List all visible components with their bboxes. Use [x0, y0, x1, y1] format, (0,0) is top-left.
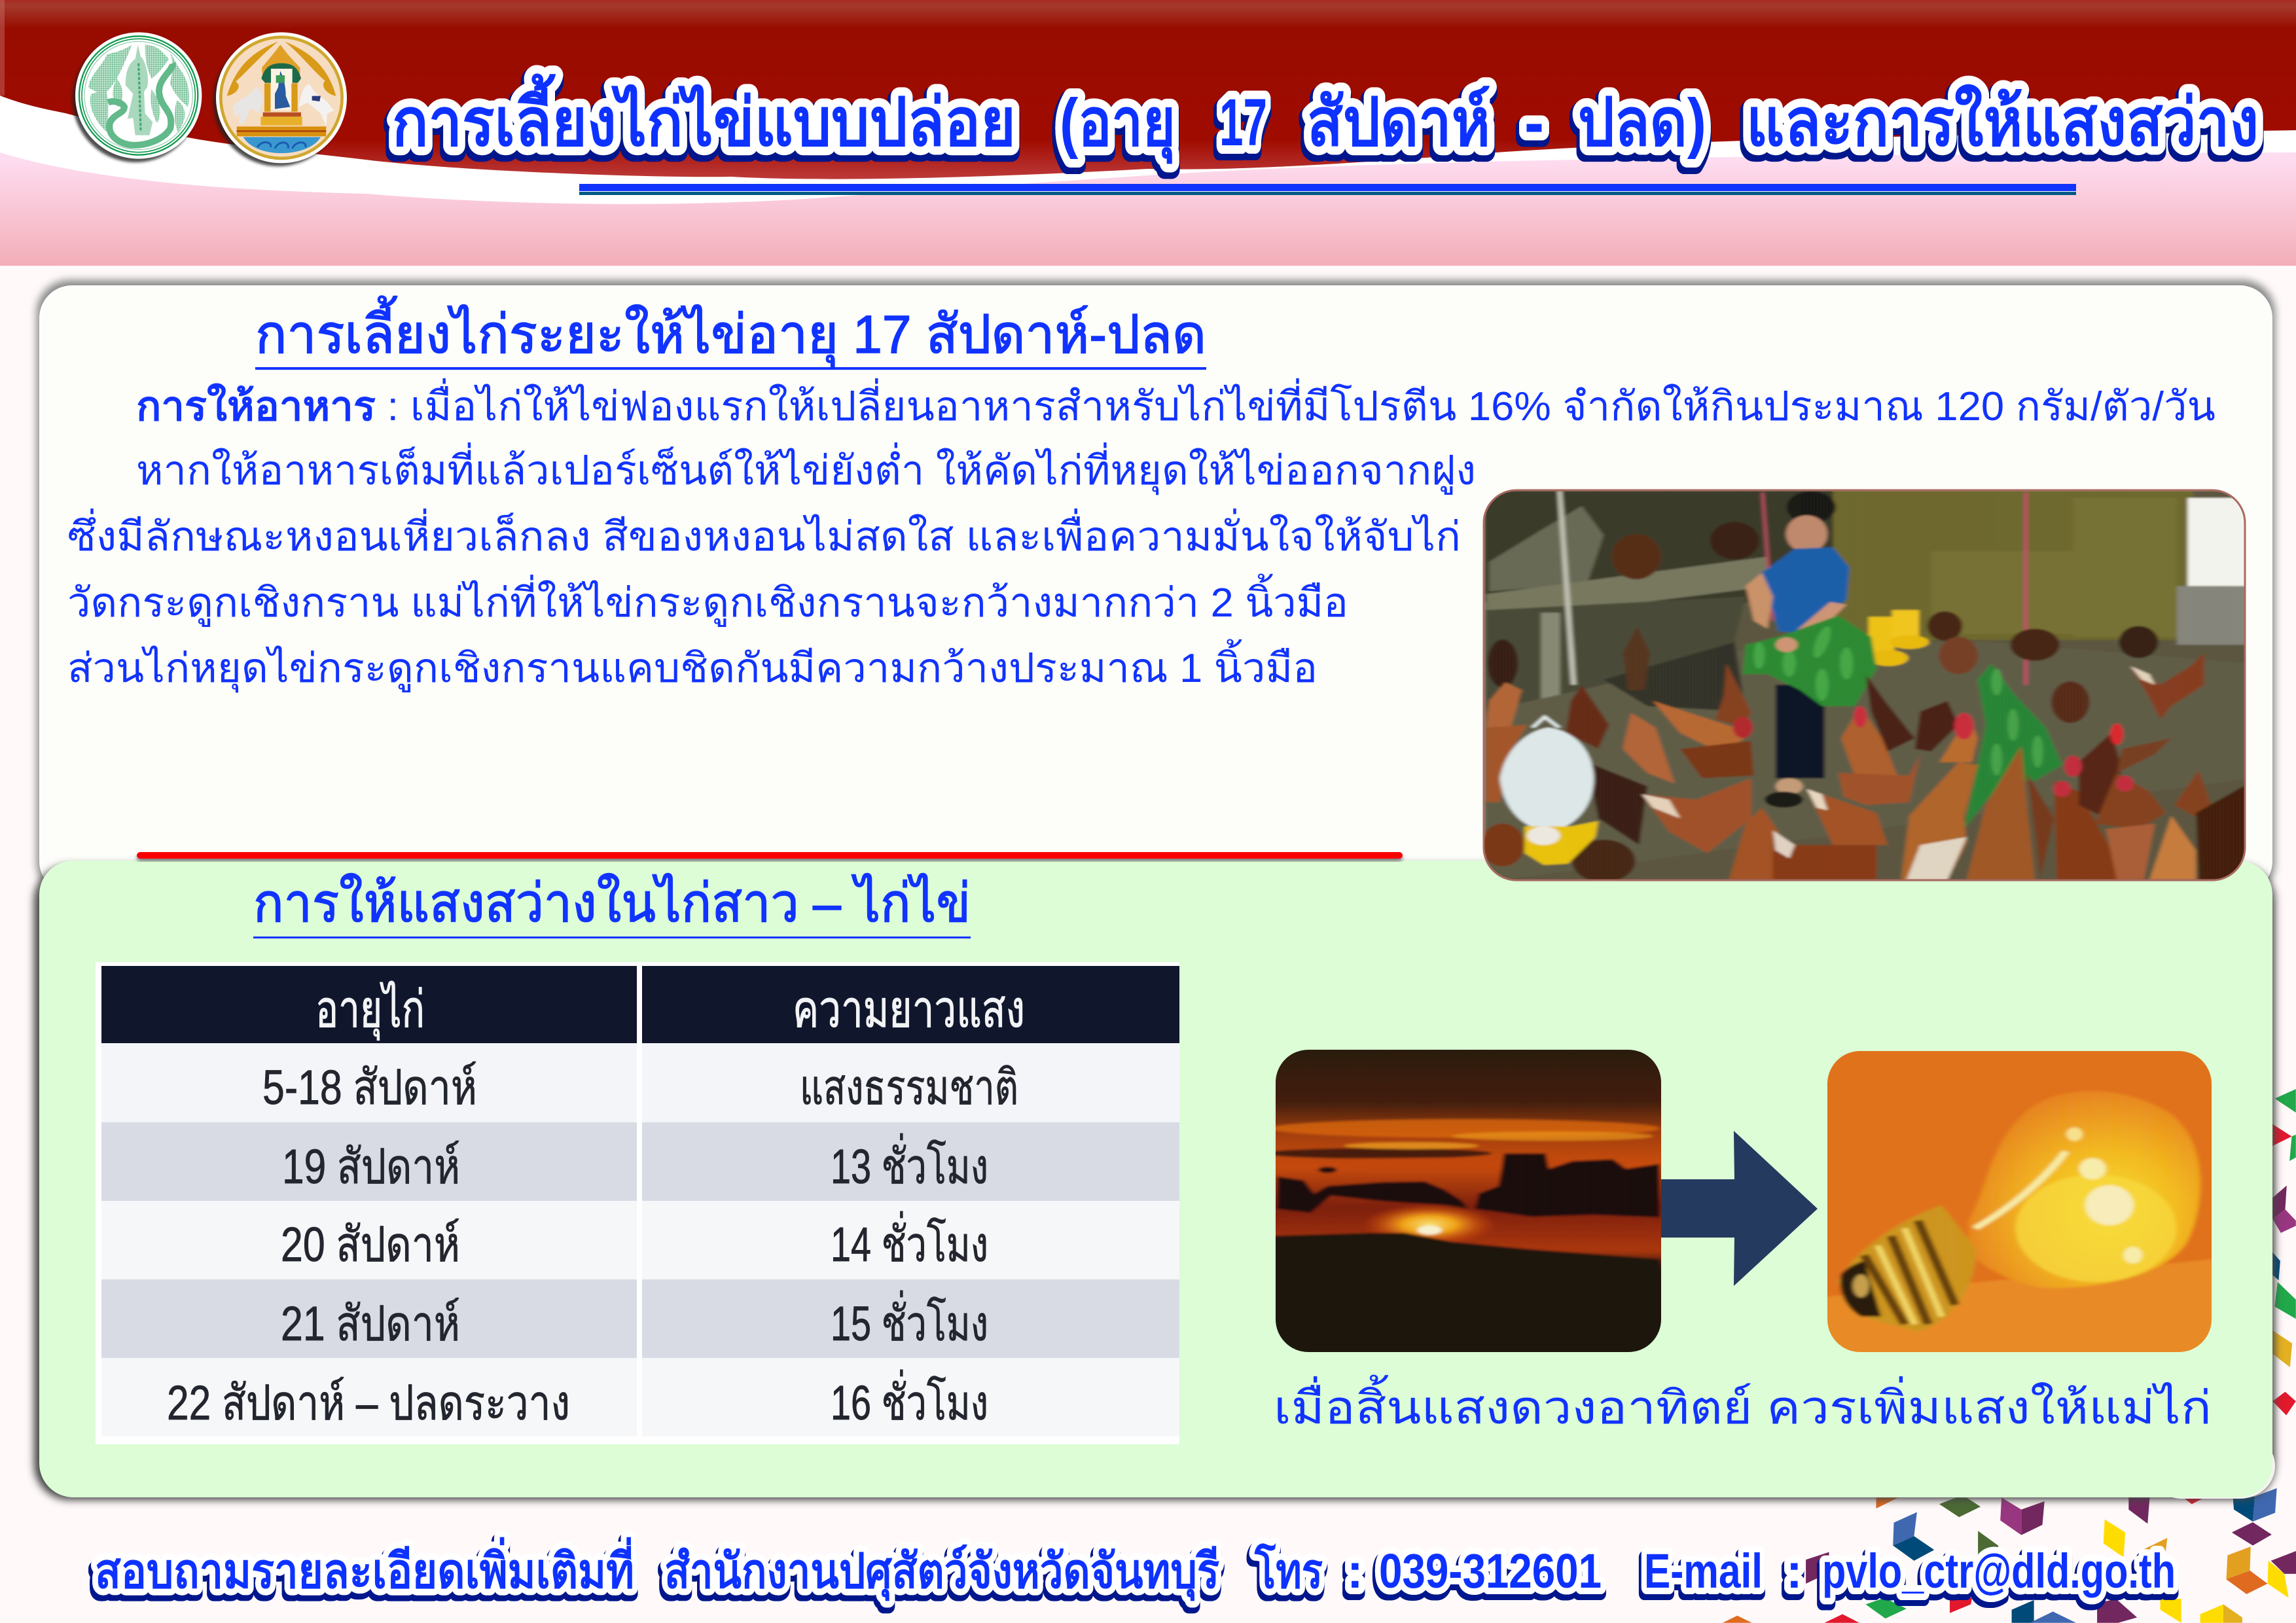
table rows: 13 ชั่วโมง [831, 1133, 988, 1194]
table rows: 19 สัปดาห์ [282, 1139, 460, 1194]
panel: lighting (green) [34, 861, 2275, 1500]
title underline bar [579, 184, 2076, 195]
footer contact line: : [1786, 1544, 1803, 1598]
table header row: อายุไก่ [315, 980, 425, 1041]
white drinker [1500, 728, 1594, 832]
footer contact line [95, 1537, 2176, 1601]
title: - [1524, 85, 1544, 160]
lighting table [96, 962, 1179, 1444]
logo: green seal of Department of Livestock [73, 32, 202, 162]
table rows: 21 สัปดาห์ [281, 1296, 460, 1351]
heading: lighting for pullets and layers: การให้แสงสว่างในไก่สาว – ไก่ไข่ [253, 874, 971, 933]
footer contact line: สำนักงานปศุสัตว์จังหวัดจันทบุรี [664, 1544, 1219, 1601]
footer contact line: : [1347, 1544, 1363, 1598]
footer contact line: pvlo_ctr@dld.go.th [1822, 1544, 2176, 1598]
table rows: 22 สัปดาห์ – ปลดระวาง [167, 1376, 570, 1430]
table rows [101, 1043, 1179, 1436]
hens [1488, 639, 1518, 687]
text block: feeding paragraph [67, 378, 2215, 692]
photo: boy feeding free-range hens [1481, 490, 2248, 883]
logo: gold provincial seal [213, 32, 347, 166]
text block: feeding paragraph: หากให้อาหารเต็มที่แล้วเปอร์เซ็นต์ให้ไข่ยังต่ำ ให้คัดไก่ที่หยุดให้ไข่ออกจากฝูง [136, 442, 1476, 495]
table rows: 16 ชั่วโมง [831, 1369, 988, 1430]
header banner [0, 0, 2296, 266]
text block: feeding paragraph: ส่วนไก่หยุดไข่กระดูกเชิงกรานแคบชิดกันมีความกว้างประมาณ 1 นิ้วมือ [67, 639, 1318, 692]
footer contact line: โทร [1254, 1543, 1323, 1598]
decorative coloured cubes, bottom right [1723, 1488, 2296, 1623]
title [392, 73, 2259, 164]
photo: glowing light bulb [1821, 1048, 2223, 1355]
footer contact line: 039-312601 [1379, 1544, 1602, 1598]
table rows: 5-18 สัปดาห์ [262, 1060, 477, 1115]
footer contact line: สอบถามรายละเอียดเพิ่มเติมที่ [95, 1537, 634, 1598]
background hens [1928, 611, 1962, 641]
text block: feeding paragraph: วัดกระดูกเชิงกราน แม่ไก่ที่ให้ไข่กระดูกเชิงกรานจะกว้างมากกว่า 2 นิ้วมือ [67, 573, 1348, 627]
heading: layer-stage feeding: การเลี้ยงไก่ระยะให้ไข่อายุ 17 สัปดาห์-ปลด [255, 296, 1206, 367]
greens [1743, 615, 1876, 706]
table rows: 20 สัปดาห์ [281, 1217, 460, 1272]
table rows: แสงธรรมชาติ [800, 1060, 1018, 1115]
table rows: 15 ชั่วโมง [831, 1290, 988, 1351]
text block: feeding paragraph: ซึ่งมีลักษณะหงอนเหี่ยวเล็กลง สีของหงอนไม่สดใส และเพื่อความมั่นใจให้จับไก่ [67, 508, 1461, 560]
title: (อายุ [1060, 85, 1175, 164]
text block: feeding paragraph: การให้อาหาร : เมื่อไก่ให้ไข่ฟองแรกให้เปลี่ยนอาหารสำหรับไก่ไข่ที่มีโปรตีน 16% จำกัดให้กินประมาณ 120 กรัม/ตัว/วัน [136, 378, 2215, 429]
caption: add light after sunset: เมื่อสิ้นแสงดวงอาทิตย์ ควรเพิ่มแสงให้แม่ไก่ [1274, 1374, 2212, 1433]
photo: sunset [1257, 1048, 1673, 1355]
boy [1787, 491, 1836, 524]
yellow feeders [1869, 616, 1895, 657]
gold seal elephants [232, 87, 263, 124]
decorative coloured cubes, right edge [2272, 1089, 2296, 1416]
red divider bar [137, 852, 1403, 861]
title: ปลด) [1578, 85, 1706, 160]
table header row [101, 966, 1179, 1043]
photo frame outline [1484, 490, 2245, 880]
arrow: sunset to light bulb [1661, 1131, 1818, 1286]
gold seal kanok scrolls [227, 41, 278, 96]
green seal ornament [88, 45, 189, 145]
title: การเลี้ยงไก่ไข่แบบปล่อย [392, 73, 1016, 160]
table rows: 14 ชั่วโมง [831, 1211, 988, 1272]
panel: feeding (cream) [37, 280, 2275, 895]
title: 17 [1219, 85, 1267, 160]
table header row: ความยาวแสง [793, 980, 1025, 1038]
title: สัปดาห์ [1307, 85, 1490, 160]
footer contact line: E-mail [1644, 1544, 1763, 1598]
